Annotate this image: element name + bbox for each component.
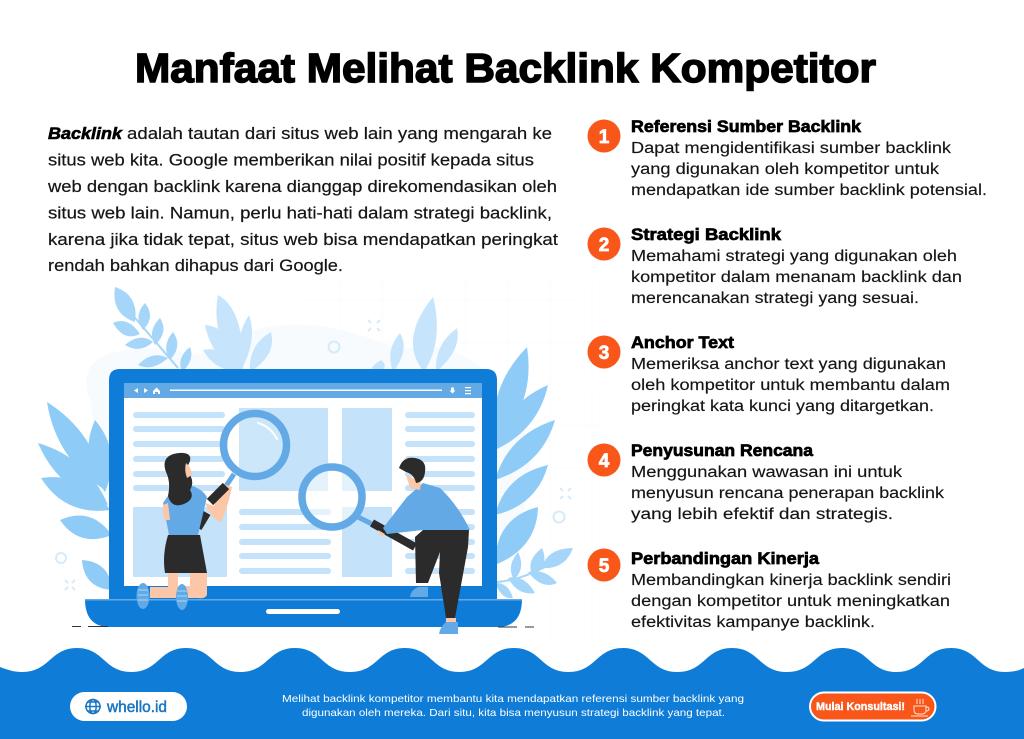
intro text block: adalah tautan dari situs web lain yang mengarah ke	[127, 125, 552, 143]
laptop screen	[124, 383, 482, 586]
intro text block: situs web lain. Namun, perlu hati-hati dalam strategi backlink,	[48, 204, 552, 222]
background blob	[86, 324, 530, 600]
icon: right magnifier	[302, 467, 374, 527]
item 1: mendapatkan ide sumber backlink potensial.	[631, 182, 987, 199]
item 5: 5	[599, 556, 610, 577]
item 2: 2	[599, 235, 609, 256]
item 4: yang lebih efektif dan strategis.	[631, 506, 893, 523]
shoes	[410, 587, 428, 597]
item 2: kompetitor dalam menanam backlink dan	[631, 269, 962, 286]
icon: left large leaves	[38, 402, 112, 590]
item 2: merencanakan strategi yang sesuai.	[631, 290, 919, 307]
call to action button	[810, 692, 936, 720]
item 5: Perbandingan Kinerja	[631, 550, 820, 568]
item 3: 3	[599, 343, 609, 364]
footer wave band	[0, 648, 1024, 739]
item 2: Strategi Backlink	[631, 226, 782, 244]
item 5	[588, 548, 951, 631]
item 3: Memeriksa anchor text yang digunakan	[631, 356, 946, 373]
page content placeholders	[133, 408, 475, 577]
icon: left sprig	[113, 287, 191, 372]
hair	[165, 453, 192, 505]
legs	[150, 573, 207, 598]
icon: top light leaves	[203, 295, 458, 372]
laptop lid	[109, 369, 497, 600]
icon: coffee cup	[911, 699, 929, 716]
intro text block: rendah bahkan dihapus dari Google.	[48, 257, 343, 275]
arm	[205, 484, 232, 522]
panel: benefit list	[588, 118, 987, 631]
item 4: Menggunakan wawasan ini untuk	[631, 464, 902, 481]
item 1: Dapat mengidentifikasi sumber backlink	[631, 140, 951, 157]
footer	[0, 648, 1024, 739]
laptop	[72, 369, 534, 627]
browser bar	[124, 383, 482, 398]
item 4	[588, 442, 944, 523]
intro text block: situs web kita. Google memberikan nilai positif kepada situs	[48, 152, 534, 170]
item 4: menyusun rencana penerapan backlink	[631, 485, 944, 502]
item 4: 4	[599, 451, 610, 472]
intro text block	[47, 125, 558, 275]
item 3	[588, 334, 950, 415]
item 1: yang digunakan oleh kompetitor untuk	[631, 161, 939, 178]
website pill: whello.id	[106, 699, 167, 716]
shoes	[136, 583, 150, 609]
footer message: digunakan oleh mereka. Dari situ, kita bisa menyusun strategi backlink yang tepat.	[302, 707, 725, 719]
icon: left magnifier	[224, 414, 286, 486]
laptop base	[72, 599, 534, 627]
shirt	[383, 483, 470, 534]
head	[406, 475, 421, 490]
illustration: laptop with two people and magnifiers	[38, 287, 573, 634]
call to action button: Mulai Konsultasi!	[816, 701, 905, 713]
icon: right small sprig	[495, 548, 573, 598]
item 5: Membandingkan kinerja backlink sendiri	[631, 572, 951, 589]
website pill	[70, 692, 187, 721]
footer message: Melihat backlink kompetitor membantu kita mendapatkan referensi sumber backlink yang	[282, 693, 744, 705]
item 3: Anchor Text	[631, 334, 735, 352]
trousers	[415, 530, 469, 618]
item 1: Referensi Sumber Backlink	[631, 118, 862, 136]
item 2	[588, 226, 962, 307]
title: Manfaat Melihat Backlink Kompetitor	[135, 45, 876, 91]
intro text block: Backlink	[48, 125, 123, 143]
icon: right large leaves	[493, 347, 555, 565]
person: man	[372, 458, 470, 634]
item 5: dengan kompetitor untuk meningkatkan	[631, 593, 950, 610]
intro text block: web dengan backlink karena dianggap direkomendasikan oleh	[47, 178, 557, 196]
item 1: 1	[599, 127, 610, 148]
icon: decorative circles and sparkles	[56, 320, 571, 590]
item 3: oleh kompetitor untuk membantu dalam	[631, 377, 950, 394]
item 1	[588, 118, 987, 199]
item 2: Memahami strategi yang digunakan oleh	[631, 248, 957, 265]
intro text block: karena jika tidak tepat, situs web bisa mendapatkan peringkat	[48, 231, 558, 249]
item 5: efektivitas kampanye backlink.	[631, 614, 875, 631]
footer message	[282, 693, 744, 719]
item 4: Penyusunan Rencana	[631, 442, 814, 460]
icon: globe	[85, 700, 101, 714]
person: woman	[136, 453, 232, 610]
item 3: peringkat kata kunci yang ditargetkan.	[631, 398, 934, 415]
